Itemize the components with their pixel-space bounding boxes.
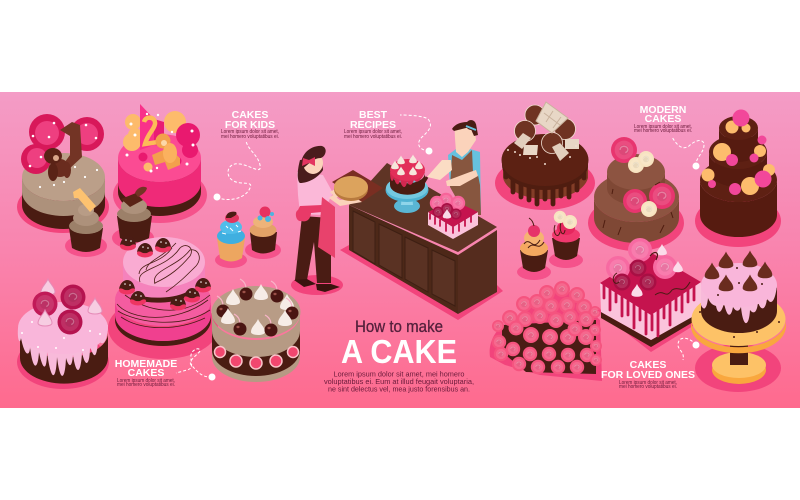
cake: pink and chocolate cake on yellow stand [691, 250, 786, 392]
dashed connector: cakes for loved ones [678, 338, 700, 360]
intro paragraph: ne sint delectus vel, mea justo forensibus an. [328, 384, 470, 394]
cake: three tier chocolate cake with balls [695, 110, 781, 247]
label: cakes for loved ones [601, 359, 695, 390]
label: modern cakes: CAKES [645, 113, 681, 125]
label: best recipes: mei homero voluptatibus ei. [344, 134, 402, 140]
dashed connector: modern cakes [672, 137, 704, 170]
label: homemade cakes: mei homero voluptatibus ei. [117, 382, 175, 388]
dashed connector: best recipes [400, 115, 432, 154]
label: best recipes: RECIPES [350, 119, 396, 131]
label: cakes for loved ones: Lorem ipsum dolor sit amet, [619, 380, 677, 386]
cupcake: blue frosting [215, 212, 247, 268]
title: how to make a cake: How to make [355, 317, 443, 336]
baker: woman holding a tray [291, 146, 383, 295]
cake: pink icing with chocolate drips and roses [17, 279, 109, 389]
label: homemade cakes [115, 358, 177, 388]
intro paragraph: Lorem ipsum dolor sit amet, mei homero [334, 370, 464, 378]
label: cakes for kids: Lorem ipsum dolor sit amet, [221, 129, 279, 135]
title: how to make a cake [341, 317, 457, 370]
label: homemade cakes: Lorem ipsum dolor sit amet, [117, 378, 175, 384]
label: cakes for loved ones: FOR LOVED ONES [601, 369, 695, 381]
label: modern cakes: MODERN [640, 104, 686, 116]
cake: square crimson cake with roses [597, 238, 706, 352]
cake: pink birthday cake with number two [113, 104, 207, 223]
small square rose cake on counter [428, 193, 478, 239]
cake: two tier chocolate cake with roses [588, 137, 684, 251]
cake: chocolate and tan birthday cake with number one [17, 114, 109, 233]
cake: tan cake with cherries and cream [212, 279, 300, 382]
cupcake: pink frosting with white roses [549, 211, 583, 268]
cake: chocolate drip cake with cookies [495, 102, 595, 210]
label: modern cakes: mei homero voluptatibus ei. [634, 128, 692, 134]
cupcake: tan frosting with number one [65, 188, 107, 257]
label: cakes for kids: CAKES [232, 109, 268, 121]
intro paragraph [324, 370, 474, 394]
label: cakes for loved ones: mei homero voluptatibus ei. [619, 384, 677, 390]
intro paragraph: voluptatibus ei. Eum at illud feugait voluptaria, [324, 377, 474, 386]
label: best recipes [344, 109, 402, 140]
cake: pink cake with chocolate line decoration [108, 236, 218, 359]
label: modern cakes [634, 104, 692, 134]
cake: heart shaped rose cake [490, 281, 602, 381]
kitchen counter [340, 163, 503, 320]
dashed connector: cakes for kids [214, 141, 260, 200]
label: homemade cakes: HOMEMADE [115, 358, 177, 370]
label: cakes for loved ones: CAKES [630, 359, 666, 371]
title: how to make a cake: A CAKE [341, 333, 457, 370]
cupcake: cherry with caramel frosting [517, 218, 551, 280]
baker: woman piping cream [424, 120, 481, 215]
cupcake: tan frosting with number two [112, 187, 154, 249]
dashed connector: homemade cakes [176, 349, 216, 380]
cake on a blue stand [386, 154, 428, 213]
label: cakes for kids: FOR KIDS [225, 119, 275, 131]
cupcake: caramel frosting with pink top [245, 206, 281, 259]
label: modern cakes: Lorem ipsum dolor sit amet, [634, 124, 692, 130]
label: cakes for kids [221, 109, 279, 140]
background panel [0, 92, 800, 408]
label: cakes for kids: mei homero voluptatibus ei. [221, 134, 279, 140]
label: homemade cakes: CAKES [128, 367, 164, 379]
label: best recipes: BEST [359, 109, 388, 121]
label: best recipes: Lorem ipsum dolor sit amet, [344, 129, 402, 135]
